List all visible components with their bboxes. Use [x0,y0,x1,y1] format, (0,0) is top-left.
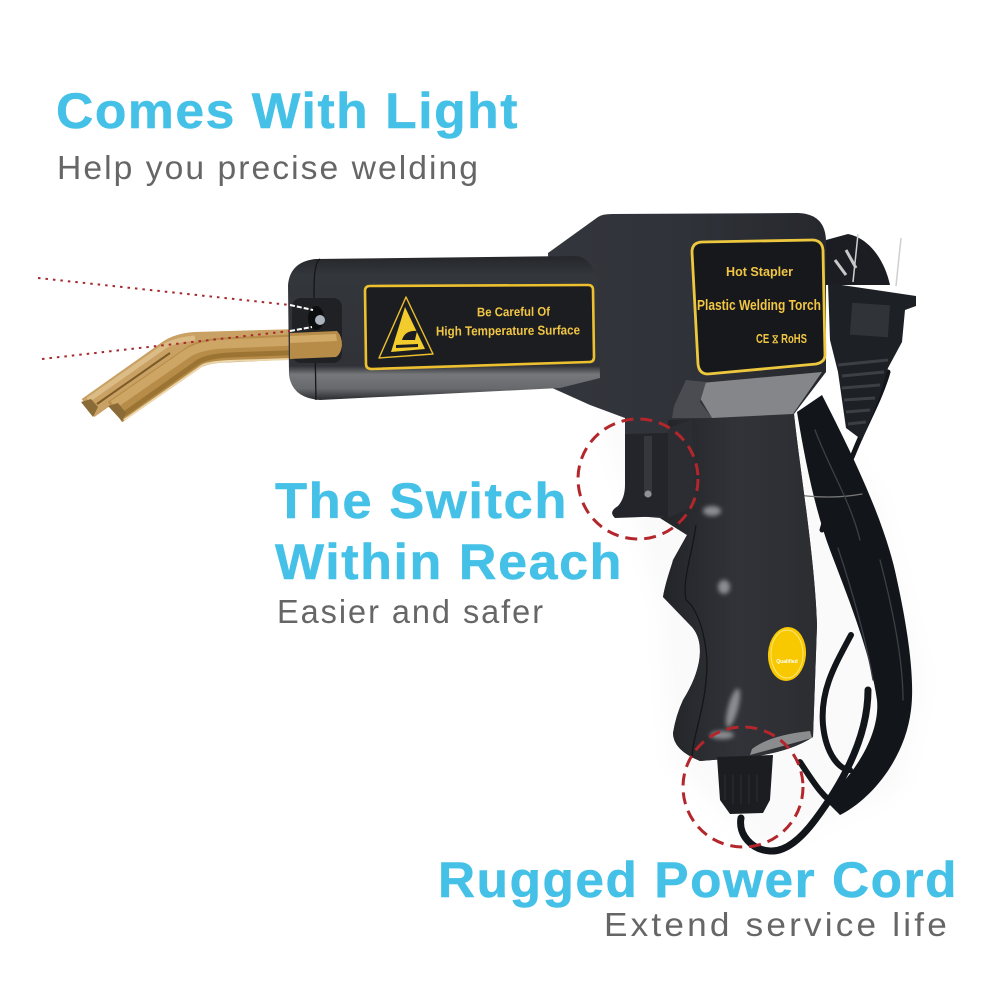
heading: The Switch Within Reach: The Switch [275,473,568,529]
light LED screw [308,306,324,330]
dashed circle: switch [578,419,698,539]
trigger switch [612,420,696,518]
grip highlights [703,506,743,739]
cord reflections [815,430,903,700]
power plug [826,234,916,440]
label text: Be Careful Of [477,305,551,319]
product label: Hot Stapler [726,264,793,279]
cord bundle [797,395,912,815]
dashed circle: power cord [683,727,803,847]
product label [692,240,825,374]
front cord loop [741,690,868,851]
light indicator dotted lines [38,278,313,359]
power cords [741,372,912,851]
gun barrel [288,256,600,400]
heading: The Switch Within Reach: Within Reach [275,534,623,590]
yellow Qualified badge: Qualified [776,659,798,665]
front tube [113,339,340,420]
back tube [88,338,300,408]
subheading: Extend service life: Extend service life [604,906,950,943]
label text: High Temperature Surface [436,322,580,339]
subheading: Easier and safer: Easier and safer [277,593,545,630]
brass welding tips [81,338,340,421]
gun body and grip [548,213,826,761]
warning label [365,285,594,369]
cable gland [717,755,773,814]
warning triangle [379,297,433,358]
nozzle plate [292,298,342,363]
label text [436,305,580,339]
product label: Plastic Welding Torch [697,297,821,314]
subheading: Help you precise welding: Help you precise welding [57,149,480,186]
yellow Qualified badge [766,626,808,682]
heading: Rugged Power Cord: Rugged Power Cord [438,852,958,908]
silver highlight under label [690,372,822,418]
inner teardrop cord [823,635,851,770]
product label: CE ⧖ RoHS [756,331,807,346]
cord tie [790,494,862,497]
soft shadow behind gun [600,415,925,850]
heading: Comes With Light: Comes With Light [56,83,519,139]
brass tube entering nozzle [290,331,342,359]
heading: The Switch Within Reach [275,473,623,590]
